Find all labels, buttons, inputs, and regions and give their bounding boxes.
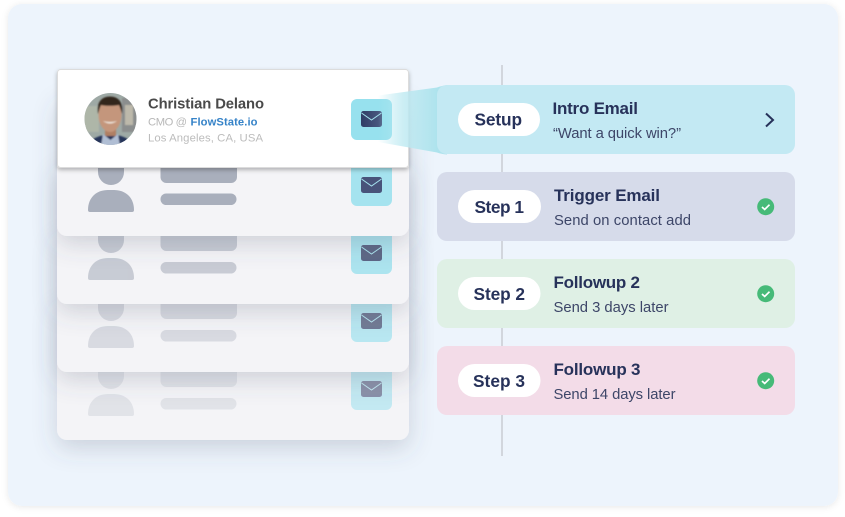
- contact location: Los Angeles, CA, USA: [148, 132, 263, 144]
- step row: step 1: [437, 172, 795, 241]
- company name: FlowState.io: [190, 116, 258, 128]
- placeholder card 4: [57, 300, 409, 440]
- timeline vertical line: [501, 65, 503, 456]
- icon: check: [757, 372, 774, 389]
- icon: check: [757, 198, 774, 215]
- email icon tile: [351, 99, 392, 140]
- title: followup 3: Followup 3: [554, 360, 640, 379]
- placeholder card 1: [57, 96, 409, 236]
- pill label: setup: Setup: [474, 110, 522, 130]
- placeholder card 3: [57, 232, 409, 372]
- avatar photo: [84, 93, 137, 146]
- pill label: step 3: Step 3: [473, 371, 525, 391]
- pill: setup: [458, 103, 540, 136]
- title: intro email: Intro Email: [552, 99, 638, 118]
- icon: check: [757, 285, 774, 302]
- active contact card: [58, 70, 408, 168]
- contact card stack: [57, 70, 409, 440]
- pill: step 3: [458, 364, 540, 397]
- title: followup 2: Followup 2: [554, 273, 640, 292]
- subtitle: want a quick win: “Want a quick win?”: [553, 126, 681, 142]
- placeholder card 2: [57, 164, 409, 304]
- pill label: step 1: Step 1: [474, 197, 524, 217]
- pill label: step 2: Step 2: [474, 284, 525, 304]
- subtitle: send 3 days later: Send 3 days later: [554, 300, 669, 316]
- beam from email icon to setup row: [367, 85, 447, 154]
- subtitle: send 14 days later: Send 14 days later: [554, 387, 676, 403]
- title: trigger email: Trigger Email: [554, 186, 660, 205]
- step row: step 3: [437, 346, 795, 415]
- pill: step 2: [458, 277, 540, 310]
- pill: step 1: [458, 190, 541, 223]
- contact role: CMO @: [148, 116, 187, 128]
- contact name: Christian Delano: [148, 97, 264, 113]
- step row: setup: [437, 85, 795, 154]
- icon: chevron: [766, 114, 773, 126]
- subtitle: send on contact add: Send on contact add: [554, 213, 691, 229]
- step row: step 2: [437, 259, 795, 328]
